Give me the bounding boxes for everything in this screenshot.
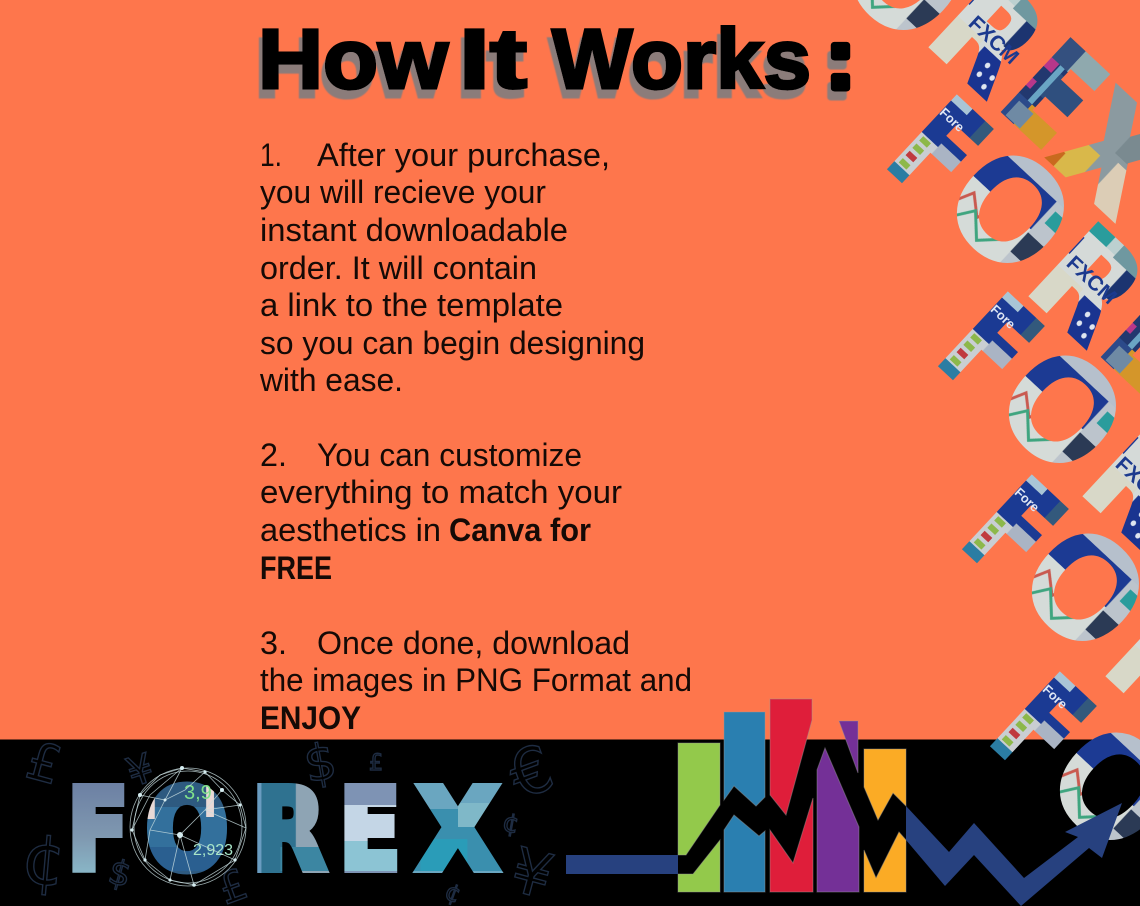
- step 3: Once done, download: [317, 625, 630, 661]
- currency symbols: ¢: [18, 817, 70, 903]
- title: [258, 12, 855, 106]
- orange bar: [864, 749, 906, 892]
- currency symbols: €: [500, 731, 563, 815]
- diagonal FOREX row 5: F: [964, 649, 1118, 808]
- step 3: ENJOY: [260, 700, 361, 736]
- step 3: the images in PNG Format and: [260, 662, 692, 698]
- bar chart: [678, 699, 906, 892]
- blue bar: [724, 712, 765, 892]
- step 1: with ease.: [259, 362, 403, 398]
- currency symbols: £: [369, 751, 383, 776]
- diagonal FOREX row 3: F: [912, 269, 1066, 428]
- currency symbols: $: [299, 732, 341, 794]
- arrow: rising zigzag: [566, 803, 1122, 906]
- diagonal FOREX row 1: E: [974, 14, 1132, 176]
- currency symbols: [18, 731, 563, 906]
- step 1: [259, 137, 645, 398]
- step 2: everything to match your: [260, 474, 622, 510]
- green bar: [678, 743, 720, 892]
- FOREX wordmark: [67, 765, 499, 896]
- diagonal FOREX row 5: Fore: [1040, 682, 1070, 712]
- step 2: [260, 437, 622, 586]
- step 1: order. It will contain: [260, 250, 537, 286]
- step 1: instant downloadable: [260, 212, 568, 248]
- diagonal FOREX row 5: [964, 649, 1140, 884]
- step 3: [260, 625, 692, 736]
- diagonal FOREX row 4: F: [936, 452, 1090, 611]
- step 1: a link to the template: [260, 287, 563, 323]
- diagonal FOREX row 3: [912, 269, 1140, 573]
- text block: instructions: [259, 137, 692, 736]
- diagonal FOREX row 4: [936, 452, 1140, 753]
- diagonal FOREX row 1: [811, 0, 1140, 245]
- currency symbols: ¢: [500, 808, 522, 840]
- currency symbols: £: [20, 731, 67, 797]
- step 1: you will recieve your: [260, 174, 546, 210]
- title: It: [459, 12, 527, 106]
- title: :: [826, 12, 855, 106]
- FOREX wordmark: E: [339, 765, 401, 896]
- step 2: FREE: [260, 550, 332, 586]
- currency symbols: $: [104, 852, 135, 896]
- FOREX wordmark: X: [417, 765, 499, 896]
- diagonal FOREX row 2: O: [915, 113, 1106, 307]
- currency symbols: ¥: [121, 745, 160, 797]
- red bar: [770, 699, 813, 892]
- FOREX wordmark: O: [146, 766, 228, 896]
- title: Works: [552, 12, 811, 106]
- step 2: Canva for: [449, 512, 591, 548]
- diagonal FOREX row 1: FXCM: [964, 12, 1023, 69]
- step 2: aesthetics in: [260, 512, 441, 548]
- step 2: 2.: [260, 437, 287, 473]
- diagonal FOREX row 2: [861, 72, 1140, 421]
- diagonal FOREX row 3: Fore: [988, 302, 1018, 332]
- title: How: [258, 12, 449, 106]
- step 1: After your purchase,: [317, 137, 610, 173]
- diagonal FOREX row 2: FXCM: [1062, 252, 1121, 309]
- footer band: [0, 740, 1140, 906]
- FOREX wordmark: F: [67, 765, 129, 896]
- diagonal FOREX row 4: Fore: [1012, 485, 1042, 515]
- step 1: 1.: [260, 137, 282, 173]
- FOREX wordmark: 3,9: [184, 782, 212, 804]
- icon: network globe: [130, 766, 246, 887]
- diagonal FOREX row 2: Fore: [937, 105, 967, 135]
- globe nodes: [130, 766, 242, 887]
- step 2: You can customize: [317, 437, 582, 473]
- diagonal FOREX row 2: F: [861, 72, 1015, 231]
- FOREX wordmark: 2,923: [193, 842, 233, 859]
- FOREX wordmark: R: [252, 765, 326, 896]
- step 1: so you can begin designing: [260, 325, 645, 361]
- purple bar: [817, 721, 859, 892]
- step 3: 3.: [260, 625, 287, 661]
